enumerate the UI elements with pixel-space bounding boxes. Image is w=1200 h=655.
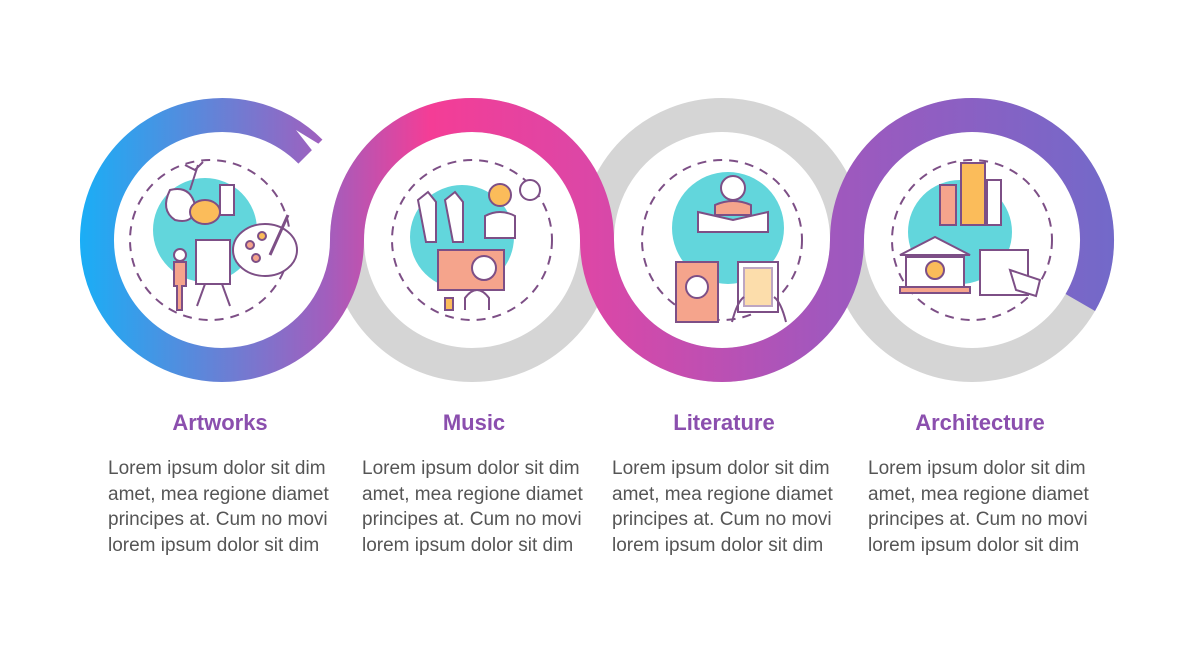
gradient ribbon [97, 115, 1097, 365]
text: artworks: Lorem ipsum dolor sit dim amet, mea regione diamet principes at. Cum no movi lorem ipsum dolor sit dim [108, 458, 329, 556]
heading: Music: Music [443, 410, 505, 435]
heading: Literature: Literature [673, 410, 775, 435]
icon: architecture [892, 160, 1052, 320]
icon: literature [642, 160, 802, 322]
text: literature: Lorem ipsum dolor sit dim amet, mea regione diamet principes at. Cum no movi lorem ipsum dolor sit dim [612, 458, 833, 556]
gray rings [347, 115, 1097, 365]
heading: Artworks: Artworks [172, 410, 268, 435]
icon: artworks [130, 160, 297, 320]
text: music: Lorem ipsum dolor sit dim amet, mea regione diamet principes at. Cum no movi lorem ipsum dolor sit dim [362, 458, 583, 556]
text: architecture: Lorem ipsum dolor sit dim amet, mea regione diamet principes at. Cum no movi lorem ipsum dolor sit dim [868, 458, 1089, 556]
arrow notch [296, 130, 332, 163]
icon: music [392, 160, 552, 320]
heading: Architecture: Architecture [915, 410, 1045, 435]
